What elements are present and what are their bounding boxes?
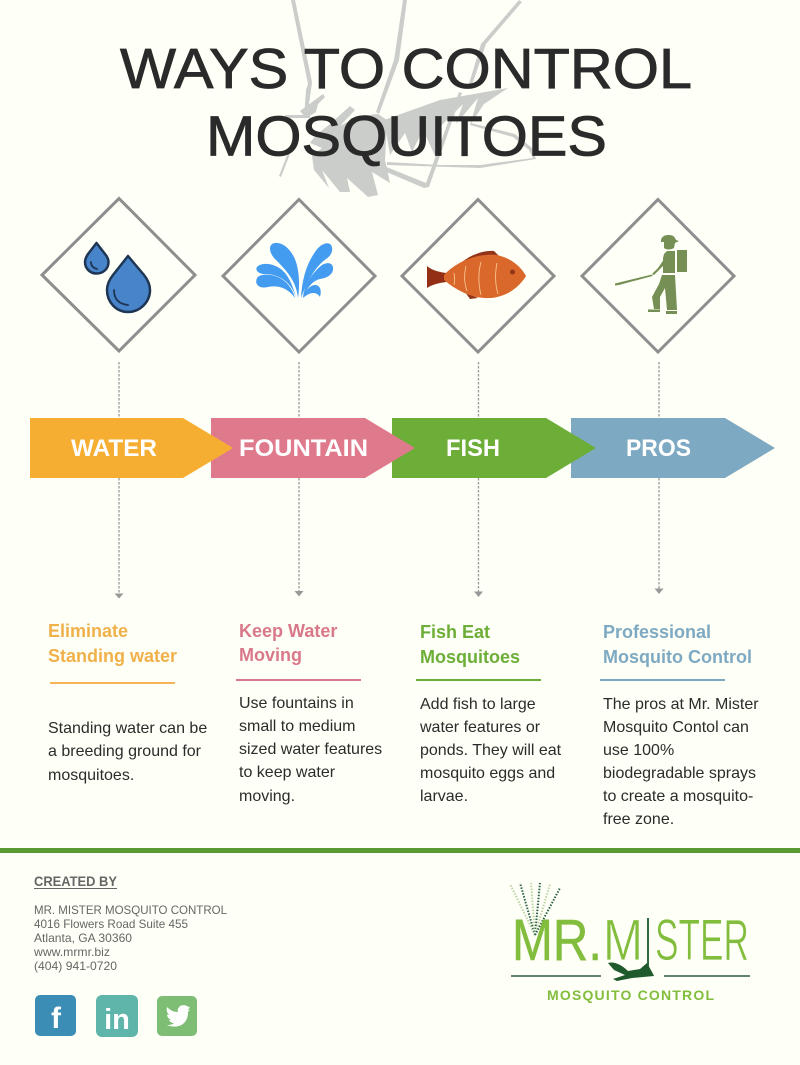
arrow: water — [30, 418, 233, 478]
text block: fish eat mosquitoes: Fish Eat — [420, 622, 490, 642]
logo mosquito — [608, 962, 654, 981]
diamond: water — [42, 198, 195, 351]
text block: eliminate standing water: a breeding ground for — [48, 743, 202, 760]
icon: facebook — [35, 995, 76, 1036]
icon: facebook: f — [51, 1002, 62, 1035]
arrow: water: WATER — [71, 435, 157, 462]
icon: twitter — [157, 996, 197, 1036]
icon: sprayer worker — [615, 235, 687, 314]
text block: professional mosquito control: Professional — [603, 622, 711, 642]
logo rules — [511, 975, 750, 977]
text block: keep water moving: sized water features — [239, 741, 382, 758]
text block: fish eat mosquitoes: Mosquitoes — [420, 647, 520, 667]
diamond: pros — [582, 200, 734, 352]
footer: created by: 4016 Flowers Road Suite 455 — [34, 917, 188, 931]
title — [120, 37, 692, 168]
arrow: fish: FISH — [446, 435, 500, 462]
connector: water — [114, 362, 124, 598]
text block: eliminate standing water: mosquitoes. — [48, 767, 134, 784]
text block: professional mosquito control — [600, 622, 759, 828]
footer: created by: www.mrmr.biz — [33, 945, 110, 959]
text block: professional mosquito control: to create a mosquito- — [603, 788, 753, 805]
arrow: fish — [392, 418, 596, 478]
footer: created by: (404) 941-0720 — [34, 959, 117, 973]
footer: created by — [33, 873, 227, 973]
diamond: fish — [402, 200, 554, 352]
text block: fish eat mosquitoes: mosquito eggs and — [420, 765, 555, 782]
arrow: pros: PROS — [626, 435, 691, 462]
text block: fish eat mosquitoes — [416, 622, 562, 805]
text block: fish eat mosquitoes: larvae. — [420, 788, 468, 805]
title: WAYS TO CONTROL — [120, 37, 692, 100]
text block: professional mosquito control: The pros at Mr. Mister — [603, 696, 759, 713]
text block: eliminate standing water: Standing water can be — [48, 720, 207, 737]
connector: pros — [654, 362, 664, 594]
logo spray — [510, 883, 560, 935]
footer: created by: MR. MISTER MOSQUITO CONTROL — [34, 903, 227, 917]
icon: linkedin — [96, 995, 138, 1037]
text block: keep water moving: Use fountains in — [239, 695, 354, 712]
text block: professional mosquito control: use 100% — [603, 742, 674, 759]
diamond: fountain — [223, 200, 375, 352]
text block: keep water moving — [236, 621, 382, 805]
icon: fish — [427, 251, 526, 299]
footer divider — [0, 848, 800, 853]
text block: fish eat mosquitoes: water features or — [419, 719, 541, 736]
logo wordmark second M: M — [603, 908, 643, 973]
text block: eliminate standing water: Eliminate — [48, 621, 128, 641]
text block: professional mosquito control: biodegradable sprays — [603, 765, 756, 782]
title: MOSQUITOES — [206, 104, 607, 168]
arrow: pros — [571, 418, 775, 478]
text block: keep water moving: small to medium — [239, 718, 355, 735]
connector: fountain — [294, 362, 304, 596]
text block: keep water moving: Moving — [239, 645, 302, 665]
text block: keep water moving: Keep Water — [239, 621, 337, 641]
connector: fish — [474, 362, 483, 597]
logo spray wand — [647, 918, 649, 968]
text block: keep water moving: moving. — [239, 788, 295, 805]
text block: fish eat mosquitoes: ponds. They will eat — [420, 742, 562, 759]
text block: eliminate standing water: Standing water — [48, 646, 177, 666]
arrow: fountain: FOUNTAIN — [239, 435, 368, 462]
text block: eliminate standing water — [48, 621, 207, 784]
text block: professional mosquito control: Mosquito Contol can — [603, 719, 749, 736]
footer: created by: CREATED BY — [34, 873, 118, 889]
logo wordmark: MR. — [512, 908, 602, 973]
icon: fountain splash — [256, 243, 333, 298]
text block: professional mosquito control: free zone. — [603, 811, 674, 828]
logo: Mr. Mister Mosquito Control — [510, 883, 750, 1003]
text block: fish eat mosquitoes: Add fish to large — [420, 696, 536, 713]
arrow: fountain — [211, 418, 415, 478]
text block: professional mosquito control: Mosquito Control — [603, 647, 752, 667]
icon: linkedin: in — [104, 1004, 130, 1036]
watermark: mosquito illustration — [279, 0, 536, 197]
icon: water drops — [85, 243, 150, 312]
logo tagline: MOSQUITO CONTROL — [547, 987, 714, 1003]
text block: keep water moving: to keep water — [239, 764, 336, 781]
footer: created by: Atlanta, GA 30360 — [34, 931, 132, 945]
